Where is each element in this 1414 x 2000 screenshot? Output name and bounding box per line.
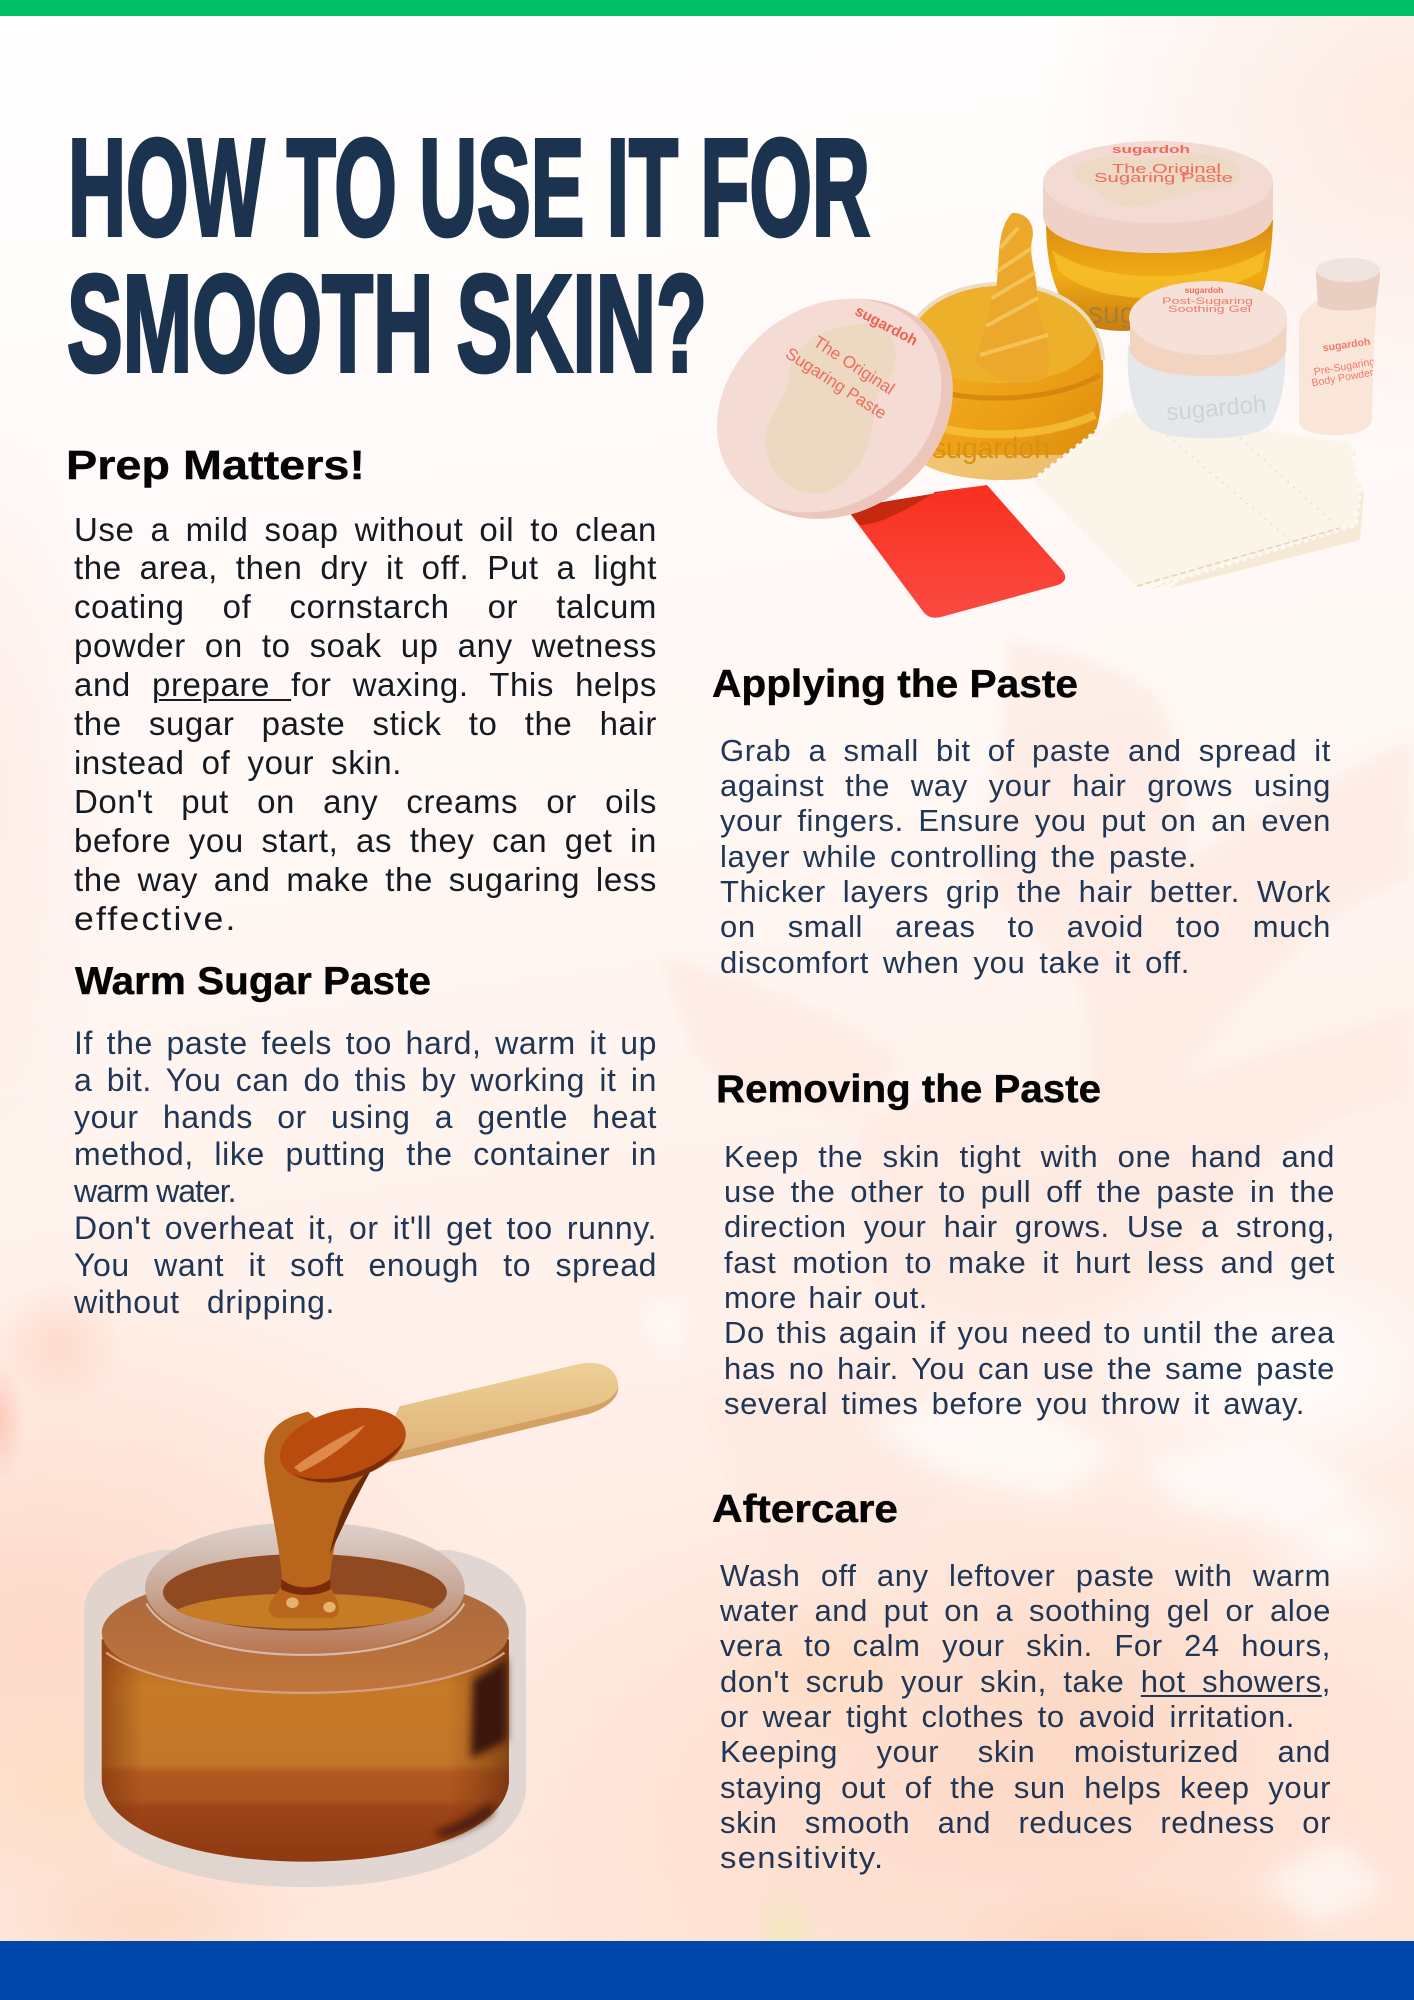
text block: prep matters: the area, then dry it off. Put a light — [74, 549, 657, 586]
small soothing gel jar — [1128, 281, 1287, 438]
text block: prep matters: Don't put on any creams or oils — [74, 783, 657, 820]
text block: warm sugar paste: warm water. — [74, 1173, 235, 1209]
text block: applying the paste: discomfort when you take it off. — [720, 945, 1190, 980]
jar glass — [84, 1550, 526, 1887]
text block: aftercare: or wear tight clothes to avoid irritation. — [720, 1699, 1295, 1734]
top green bar — [0, 0, 1414, 16]
small soothing gel jar: sugardoh — [1185, 285, 1223, 295]
text block: prep matters: powder on to soak up any wetness — [74, 627, 657, 664]
text block: prep matters — [74, 510, 657, 937]
text block: applying the paste: your fingers. Ensure you put on an even — [720, 803, 1331, 838]
front lid: The Original — [810, 332, 898, 399]
text block: prep matters: the way and make the sugaring less — [74, 861, 657, 898]
text block: warm sugar paste: If the paste feels too hard, warm it up — [74, 1025, 657, 1061]
heading: Aftercare: Aftercare — [712, 1488, 898, 1531]
powder bottle — [1299, 258, 1380, 435]
text block: aftercare — [720, 1558, 1331, 1875]
text block: applying the paste: Grab a small bit of paste and spread it — [720, 733, 1331, 768]
red scraper — [846, 485, 1065, 618]
wax jar with spatula illustration — [84, 1362, 618, 1887]
text block: applying the paste: on small areas to avoid too much — [720, 909, 1331, 944]
back jar: sugardoh — [1088, 297, 1213, 330]
small soothing gel jar: sugardoh — [1165, 391, 1267, 426]
powder bottle: Body Powder — [1311, 367, 1375, 389]
text block: removing the paste: fast motion to make it hurt less and get — [724, 1245, 1335, 1280]
text block: warm sugar paste: You want it soft enough to spread — [74, 1247, 657, 1283]
text block: removing the paste: use the other to pull off the paste in the — [724, 1174, 1335, 1209]
text block: prep matters: effective. — [74, 900, 238, 937]
text block: warm sugar paste: without dripping. — [74, 1284, 335, 1320]
amber wax — [102, 1639, 509, 1862]
back jar: sugardoh — [1112, 144, 1190, 156]
text block: aftercare: staying out of the sun helps keep your — [720, 1770, 1331, 1805]
text block: aftercare: don't scrub your skin, take hot showers, — [720, 1664, 1331, 1699]
text block: prep matters: and prepare for waxing. This helps — [74, 666, 657, 703]
powder bottle: sugardoh — [1322, 336, 1371, 354]
text block: removing the paste: direction your hair grows. Use a strong, — [724, 1209, 1335, 1244]
text block: applying the paste — [720, 733, 1331, 980]
spatula stick — [373, 1363, 618, 1466]
text block: applying the paste: Thicker layers grip the hair better. Work — [720, 874, 1331, 909]
wax blob on spatula — [272, 1396, 414, 1495]
text block: aftercare: sensitivity. — [720, 1840, 884, 1875]
front lid: Sugaring Paste — [782, 344, 890, 423]
heading: Applying the Paste: Applying the Paste — [712, 663, 1078, 706]
text block: removing the paste: several times before you throw it away. — [724, 1386, 1305, 1421]
text block: prep matters: instead of your skin. — [74, 744, 402, 781]
text block: warm sugar paste: your hands or using a gentle heat — [74, 1099, 657, 1135]
front lid: sugardoh — [852, 302, 920, 350]
text block: prep matters: the sugar paste stick to the hair — [74, 705, 657, 742]
text block: removing the paste: Keep the skin tight with one hand and — [724, 1139, 1335, 1174]
text block: aftercare: water and put on a soothing gel or aloe — [720, 1593, 1331, 1628]
text block: aftercare: skin smooth and reduces redness or — [720, 1805, 1331, 1840]
text block: removing the paste: more hair out. — [724, 1280, 928, 1315]
back jar — [1043, 141, 1273, 331]
open jar with honey swirl — [902, 213, 1103, 490]
text block: prep matters: Use a mild soap without oil to clean — [74, 510, 657, 548]
title: HOW TO USE IT FOR — [68, 111, 870, 265]
text block: warm sugar paste: a bit. You can do this by working it in — [74, 1062, 657, 1098]
heading: Warm Sugar Paste: Warm Sugar Paste — [75, 960, 431, 1003]
text block: warm sugar paste — [74, 1025, 657, 1320]
powder bottle: Pre-Sugaring — [1313, 356, 1376, 378]
open jar with honey swirl: sugardoh — [932, 432, 1050, 465]
text block: removing the paste: has no hair. You can use the same paste — [724, 1351, 1335, 1386]
front lid — [674, 250, 997, 566]
product photo: sugaring kit with jars, scraper and strips — [717, 141, 1380, 618]
text block: aftercare: Wash off any leftover paste with warm — [720, 1558, 1331, 1593]
small soothing gel jar: Post-Sugaring — [1162, 296, 1253, 306]
text block: removing the paste — [724, 1139, 1335, 1421]
bottom blue bar — [0, 1941, 1414, 2000]
title: SMOOTH SKIN? — [67, 247, 707, 401]
text block: aftercare: vera to calm your skin. For 24 hours, — [720, 1628, 1331, 1663]
title — [67, 111, 870, 401]
text block: applying the paste: against the way your hair grows using — [720, 768, 1331, 803]
back jar: The Original — [1112, 162, 1221, 176]
drip from spatula — [264, 1412, 373, 1618]
text block: warm sugar paste: Don't overheat it, or it'll get too runny. — [74, 1210, 657, 1246]
jar shoulder and neck — [102, 1571, 509, 1694]
text block: prep matters: coating of cornstarch or talcum — [74, 588, 657, 625]
back jar: Sugaring Paste — [1094, 171, 1233, 185]
text block: prep matters: before you start, as they can get in — [74, 822, 657, 859]
text block: aftercare: Keeping your skin moisturized and — [720, 1734, 1331, 1769]
text block: removing the paste: Do this again if you need to until the area — [724, 1315, 1335, 1350]
heading: Removing the Paste: Removing the Paste — [716, 1068, 1101, 1111]
text block: warm sugar paste: method, like putting the container in — [74, 1136, 657, 1172]
small soothing gel jar: Soothing Gel — [1168, 304, 1251, 314]
text block: applying the paste: layer while controlling the paste. — [720, 839, 1197, 874]
heading: Prep Matters: Prep Matters! — [66, 442, 365, 488]
wax strips — [1032, 410, 1364, 590]
